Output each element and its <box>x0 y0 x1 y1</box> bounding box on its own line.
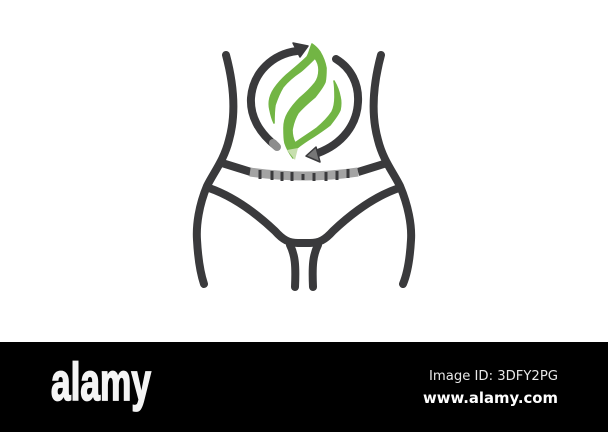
tape ticks <box>260 169 348 181</box>
image id: Image ID: 3DFY2PG <box>429 369 558 384</box>
left arc arrow <box>251 51 297 146</box>
left inner leg line <box>290 245 295 287</box>
left arrowhead <box>293 43 308 57</box>
leaf strands <box>269 44 341 158</box>
icon: circular arrows <box>251 43 358 162</box>
pale leaf base <box>287 148 298 160</box>
waistband dark left end <box>222 163 251 172</box>
right arrowhead <box>306 147 320 162</box>
black background <box>0 342 608 432</box>
left torso and hip curve <box>197 55 233 284</box>
website: www.alamy.com <box>423 389 558 407</box>
icon: green leaf flame <box>269 44 341 160</box>
waistband dark right end <box>358 163 387 172</box>
watermark bar <box>0 342 608 432</box>
tape band <box>250 172 358 176</box>
alamy logo: alamy <box>51 353 151 412</box>
right arc arrow <box>318 59 358 153</box>
right torso and hip curve <box>374 55 411 284</box>
measuring tape: grey band with ticks <box>250 169 358 181</box>
icon: slim waist body outline <box>197 55 411 287</box>
underwear line <box>209 188 399 243</box>
arc fade end <box>273 143 277 147</box>
right inner leg line <box>313 245 318 287</box>
